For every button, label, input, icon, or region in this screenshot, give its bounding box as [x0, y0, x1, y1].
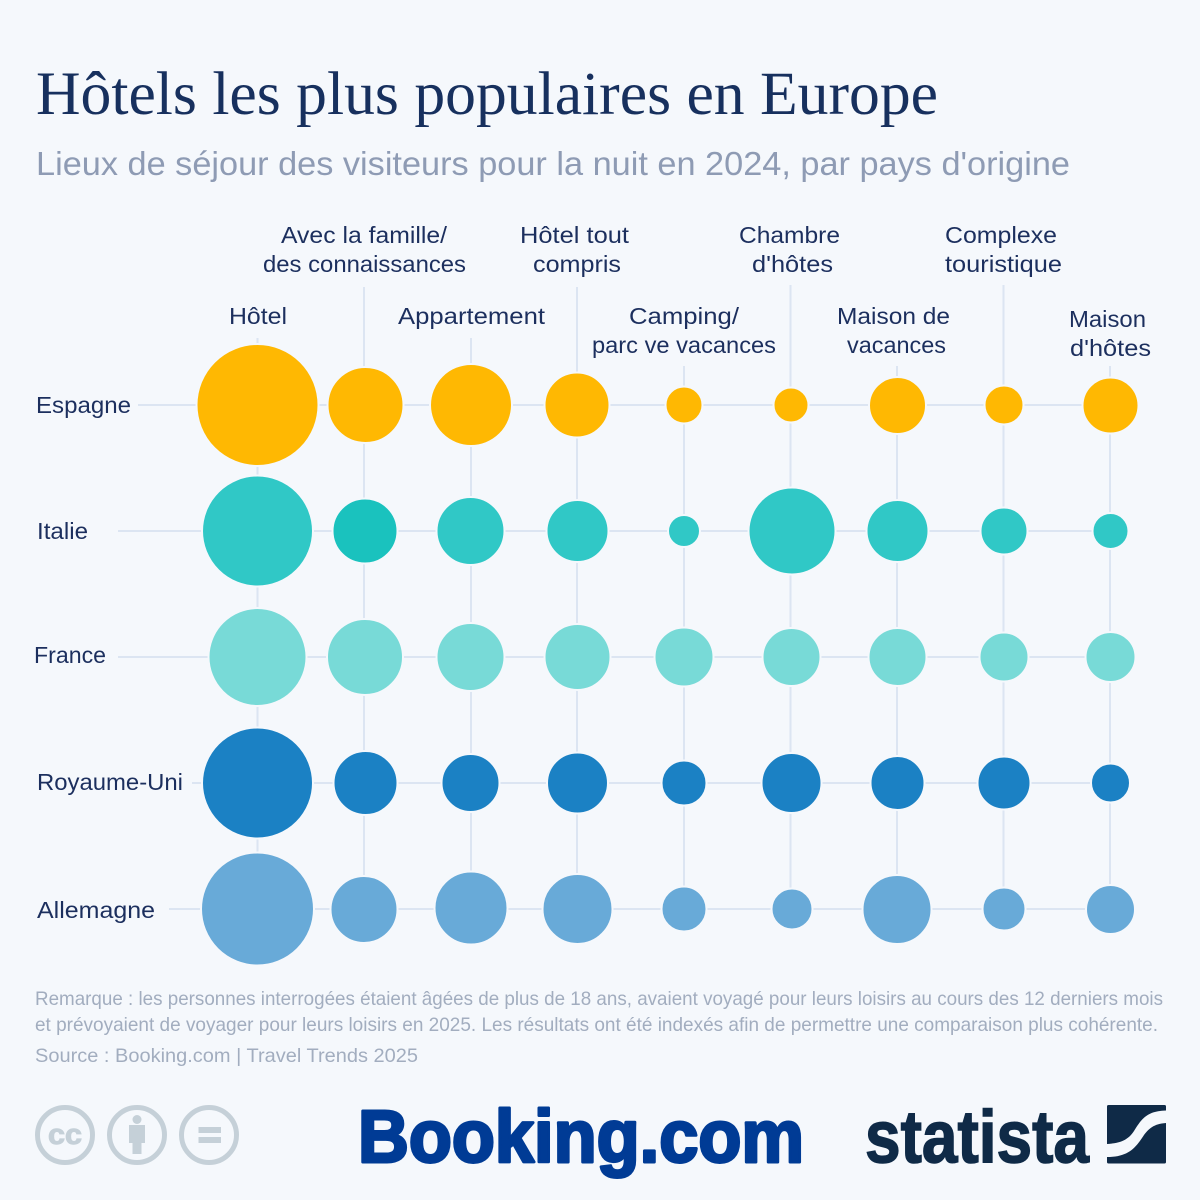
column heading: Appartement: Appartement: [398, 303, 546, 329]
row label: Royaume-Uni: Royaume-Uni: [37, 769, 183, 795]
column heading: Chambre d'hôtes: [739, 222, 840, 277]
row label: Espagne: Espagne: [36, 392, 131, 418]
title: Hôtels les plus populaires en Europe: [36, 61, 938, 128]
icon: no derivatives: [182, 1108, 236, 1162]
note: et prévoyaient de voyager pour leurs loisirs en 2025. Les résultats ont été indexés afin de permettre une comparaison plus cohérente.: [35, 1014, 1158, 1036]
column heading: Avec la famille / des connaissances: Avec la famille/: [281, 222, 447, 248]
column heading: Chambre d'hôtes: Chambre: [739, 222, 840, 248]
column heading: Camping / parc ve vacances: parc ve vacances: [592, 332, 776, 358]
row: Allemagne bubbles: [201, 852, 1135, 966]
column heading: Hôtel tout compris: Hôtel tout: [520, 222, 630, 248]
column heading: Camping / parc ve vacances: [592, 303, 776, 358]
icon: creative commons: cc: [48, 1119, 82, 1151]
row label: Allemagne: Allemagne: [37, 897, 155, 923]
row: Italie bubbles: [202, 476, 1128, 586]
column heading: Maison de vacances: [837, 303, 950, 358]
column heading: Hôtel tout compris: compris: [533, 251, 621, 277]
icon: attribution: [110, 1108, 164, 1162]
column heading: Complexe touristique: Complexe: [945, 222, 1057, 248]
column heading: Maison d'hôtes: Maison: [1069, 306, 1146, 332]
note: [35, 988, 1163, 1036]
column heading: Complexe touristique: [945, 222, 1062, 277]
column heading: Avec la famille / des connaissances: [263, 222, 466, 277]
row: Royaume-Uni bubbles: [202, 728, 1130, 838]
column heading: Chambre d'hôtes: d'hôtes: [752, 251, 833, 277]
row: Espagne bubbles: [196, 344, 1138, 466]
column heading: Hôtel: Hôtel: [229, 303, 287, 329]
logo: statista: statista: [865, 1096, 1090, 1178]
column heading: Hôtel tout compris: [520, 222, 630, 277]
column heading: Maison d'hôtes: d'hôtes: [1070, 335, 1151, 361]
icon: creative commons: [38, 1108, 92, 1162]
subtitle: Lieux de séjour des visiteurs pour la nuit en 2024, par pays d'origine: [36, 145, 1070, 182]
source: Source : Booking.com | Travel Trends 2025: [35, 1045, 418, 1067]
column heading: Complexe touristique: touristique: [945, 251, 1062, 277]
column heading: Maison d'hôtes: [1069, 306, 1151, 361]
row label: France: France: [34, 642, 106, 668]
logo: Booking.com: Booking.com: [358, 1095, 804, 1178]
note: Remarque : les personnes interrogées étaient âgées de plus de 18 ans, avaient voyagé pour leurs loisirs au cours des 12 derniers mois: [35, 988, 1163, 1010]
column heading: Camping / parc ve vacances: Camping/: [629, 303, 740, 329]
icon: statista mark: [1107, 1105, 1166, 1164]
column heading: Avec la famille / des connaissances: des connaissances: [263, 251, 466, 277]
column heading: Maison de vacances: vacances: [847, 332, 946, 358]
column heading: Maison de vacances: Maison de: [837, 303, 950, 329]
row label: Italie: Italie: [37, 518, 88, 544]
row: France bubbles: [208, 608, 1136, 706]
